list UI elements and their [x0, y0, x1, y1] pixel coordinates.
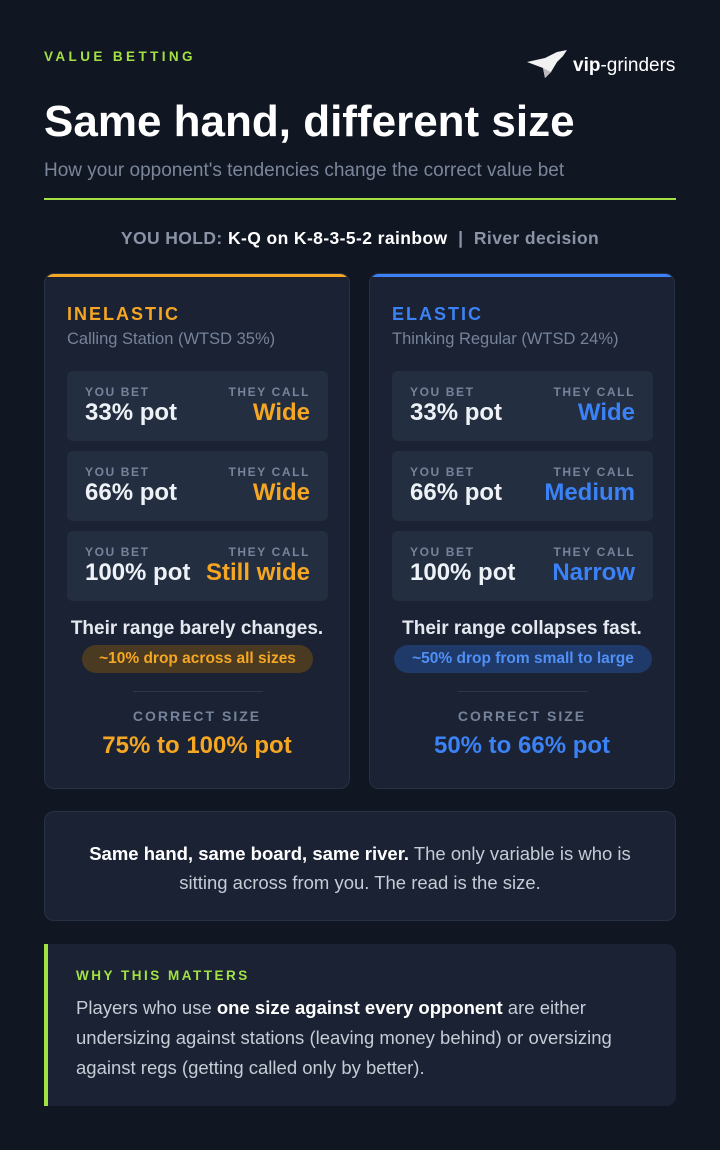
logo — [527, 50, 675, 78]
row 66: THEY CALL — [553, 465, 635, 479]
row 33: Wide — [253, 399, 310, 426]
row 66: Wide — [253, 479, 310, 506]
pill — [82, 645, 313, 673]
row 100: Narrow — [552, 559, 635, 586]
row 100: 100% pot — [85, 559, 190, 586]
row 100: THEY CALL — [553, 545, 635, 559]
correct size: 75% to 100% pot — [102, 732, 292, 759]
panel: why this matters: WHY THIS MATTERS — [76, 968, 250, 983]
row 100: 100% pot — [410, 559, 515, 586]
row 100: YOU BET — [85, 545, 150, 559]
panel: elastic — [369, 273, 675, 789]
callout — [44, 811, 676, 921]
correct size: 50% to 66% pot — [434, 732, 610, 759]
panel: inelastic: Calling Station (WTSD 35%) — [67, 330, 275, 348]
panel: why this matters: Players who use one size against every opponent are either undersizing against stations (leaving money behind) or oversizing against regs (getting called only by better). — [76, 997, 612, 1078]
summary: Their range barely changes. — [71, 618, 323, 639]
row 66: 66% pot — [410, 479, 502, 506]
summary: Their range collapses fast. — [402, 618, 642, 639]
pill: ~50% drop from small to large — [412, 650, 634, 667]
row 66: YOU BET — [85, 465, 150, 479]
title: Same hand, different size — [44, 97, 575, 146]
callout: Same hand, same board, same river. The only variable is who is sitting across from you. The read is the size. — [89, 843, 631, 893]
row 66: THEY CALL — [228, 465, 310, 479]
heading: ELASTIC — [392, 304, 483, 324]
row 100 — [392, 531, 653, 601]
logo: vip-grinders — [573, 55, 675, 76]
panel: why this matters — [44, 944, 676, 1106]
row 66: YOU BET — [410, 465, 475, 479]
pill: ~10% drop across all sizes — [99, 650, 296, 667]
row 100: YOU BET — [410, 545, 475, 559]
row 100: Still wide — [206, 559, 310, 586]
row 33: Wide — [578, 399, 635, 426]
row 33: THEY CALL — [228, 385, 310, 399]
row 66 — [392, 451, 653, 521]
panel: elastic: Thinking Regular (WTSD 24%) — [392, 330, 618, 348]
row 33 — [392, 371, 653, 441]
row 66: Medium — [544, 479, 635, 506]
row 33: YOU BET — [85, 385, 150, 399]
row 33: YOU BET — [410, 385, 475, 399]
icon: bird — [527, 50, 567, 78]
row 33: THEY CALL — [553, 385, 635, 399]
row 66 — [67, 451, 328, 521]
kicker: VALUE BETTING — [44, 49, 196, 64]
hand info: YOU HOLD: K-Q on K-8-3-5-2 rainbow | River decision — [121, 228, 599, 248]
panel: inelastic — [44, 273, 350, 789]
subtitle: How your opponent's tendencies change the correct value bet — [44, 160, 564, 181]
row 33: 33% pot — [410, 399, 502, 426]
panel: inelastic: CORRECT SIZE — [133, 708, 261, 724]
row 100 — [67, 531, 328, 601]
panel: elastic: CORRECT SIZE — [458, 708, 586, 724]
row 33: 33% pot — [85, 399, 177, 426]
row 66: 66% pot — [85, 479, 177, 506]
row 100: THEY CALL — [228, 545, 310, 559]
pill — [394, 645, 652, 673]
row 33 — [67, 371, 328, 441]
heading: INELASTIC — [67, 304, 180, 324]
